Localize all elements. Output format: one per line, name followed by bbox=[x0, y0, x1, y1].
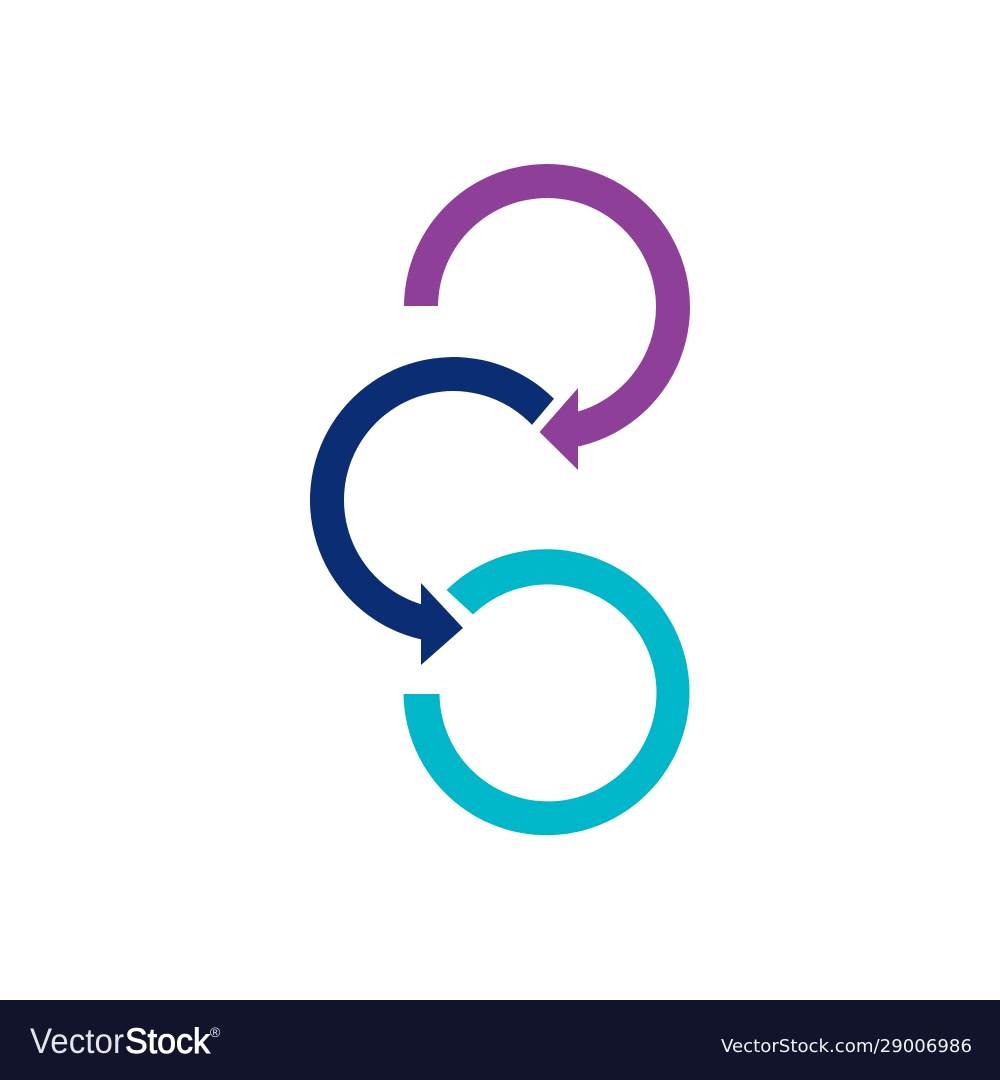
footer bar bbox=[0, 1000, 1000, 1080]
footer logo: VectorStock bbox=[30, 1022, 221, 1061]
footer logo: VectorStock: ® bbox=[210, 1024, 221, 1040]
footer image reference: VectorStock.com/29006986 bbox=[721, 1036, 972, 1057]
icon: navy circular arrow bbox=[310, 357, 554, 665]
icon: purple circular arrow bbox=[404, 164, 690, 470]
footer logo: VectorStock: Vector bbox=[30, 1022, 124, 1061]
footer logo: VectorStock: Stock bbox=[125, 1022, 210, 1061]
icon: teal circular arrow bbox=[404, 549, 689, 835]
